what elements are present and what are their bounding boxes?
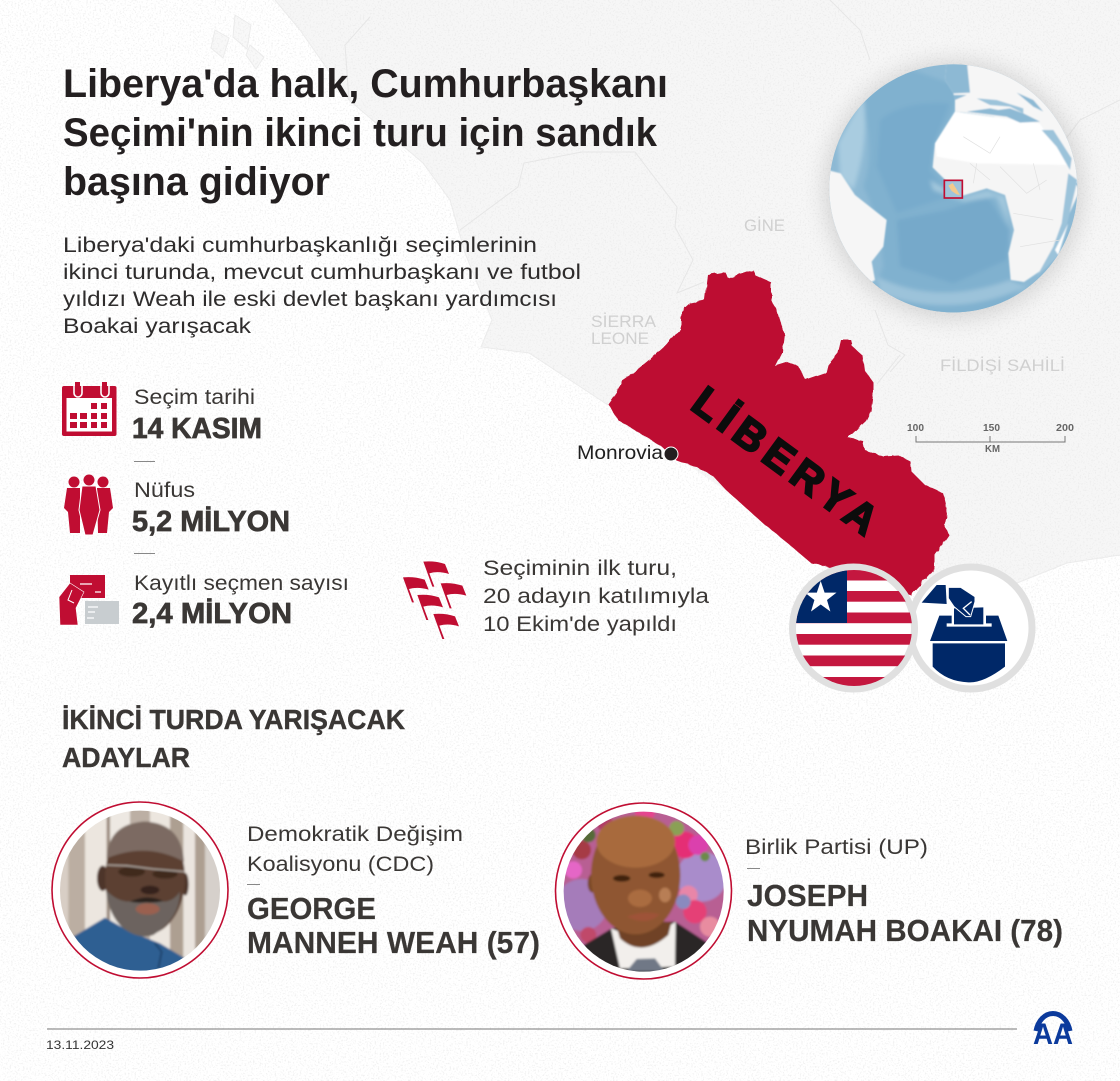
first round note: Seçiminin ilk turu,: [483, 556, 677, 580]
scale bar: [907, 423, 1074, 455]
candidate party: [247, 822, 463, 885]
map labels: neighbouring countries: FİLDİŞİ SAHİLİ: [940, 356, 1065, 375]
intro text: Liberya'daki cumhurbaşkanlığı seçimlerinin: [63, 233, 537, 257]
background map: land: [211, 0, 1120, 590]
scale bar: 200: [1056, 423, 1074, 434]
candidate: Joseph Nyumah Boakai: [556, 802, 1063, 979]
section heading: candidates: [62, 704, 405, 773]
intro text: [63, 233, 581, 338]
first round note: 20 adayın katılımıyla: [483, 584, 709, 608]
intro text: Boakai yarışacak: [63, 314, 251, 338]
scale bar: 150: [983, 423, 1000, 434]
candidate: George Manneh Weah: [52, 802, 540, 978]
logo: Anadolu Agency: AA: [1033, 1018, 1073, 1051]
title: başına gidiyor: [63, 160, 330, 204]
stat: election date: Seçim tarihi: [134, 385, 255, 409]
section heading: candidates: ADAYLAR: [62, 742, 190, 773]
stat: election date: [62, 382, 262, 445]
candidate party: Birlik Partisi (UP): [745, 835, 928, 859]
scale bar: 100: [907, 423, 924, 434]
stat: registered voters: Kayıtlı seçmen sayısı: [134, 571, 349, 595]
land: [829, 64, 1078, 283]
inland blue: Mediterranean, Red Sea, Arctic: [967, 108, 1040, 123]
icon: flags: [403, 561, 466, 639]
portrait: Weah: [52, 802, 228, 978]
stat: registered voters: [59, 571, 349, 630]
icon: people: [64, 474, 113, 535]
icon: Liberian flag: [790, 565, 920, 689]
map labels: neighbouring countries: GİNE: [744, 216, 785, 235]
candidate name: NYUMAH BOAKAI (78): [747, 913, 1063, 948]
map labels: neighbouring countries: [591, 216, 1065, 375]
map labels: neighbouring countries: LEONE: [591, 330, 649, 348]
candidate name: GEORGE: [247, 891, 376, 926]
globe: [829, 64, 1078, 312]
footer date: 13.11.2023: [46, 1038, 114, 1052]
intro text: ikinci turunda, mevcut cumhurbaşkanı ve futbol: [63, 260, 581, 284]
candidate party: Demokratik Değişim: [247, 822, 463, 846]
map labels: neighbouring countries: SİERRA: [591, 312, 656, 331]
stat: registered voters: 2,4 MİLYON: [132, 598, 292, 630]
candidate name: MANNEH WEAH (57): [247, 925, 540, 960]
globe shadow: [826, 62, 1082, 318]
candidate name: JOSEPH: [747, 878, 868, 913]
icon: calendar: [62, 382, 116, 436]
land borders: [963, 137, 1060, 247]
candidate name: [747, 878, 1063, 948]
stat: population: [64, 474, 290, 538]
locator: Liberia: [944, 180, 962, 198]
stat: population: Nüfus: [134, 478, 195, 502]
stat: population: 5,2 MİLYON: [132, 506, 290, 538]
map label: LİBERYA: LİBERYA: [684, 377, 887, 544]
stat: election date: 14 KASIM: [132, 413, 262, 445]
portrait: Boakai: [556, 802, 732, 979]
section heading: candidates: İKİNCİ TURDA YARIŞACAK: [62, 704, 405, 735]
scale bar: KM: [985, 444, 1000, 455]
title: Liberya'da halk, Cumhurbaşkanı: [63, 62, 668, 106]
icon: hand holding ballots: [59, 575, 119, 625]
Liberia map shape: [608, 270, 949, 595]
title: Seçimi'nin ikinci turu için sandık: [63, 111, 658, 155]
candidate name: [247, 891, 540, 960]
intro text: yıldızı Weah ile eski devlet başkanı yardımcısı: [63, 287, 557, 311]
candidate party: Koalisyonu (CDC): [247, 852, 434, 876]
first round note: 10 Ekim'de yapıldı: [483, 612, 677, 636]
first round note: [403, 556, 709, 639]
title: [63, 62, 668, 204]
Monrovia city marker: Monrovia: [577, 443, 663, 464]
icon: ballot box: [910, 567, 1032, 689]
